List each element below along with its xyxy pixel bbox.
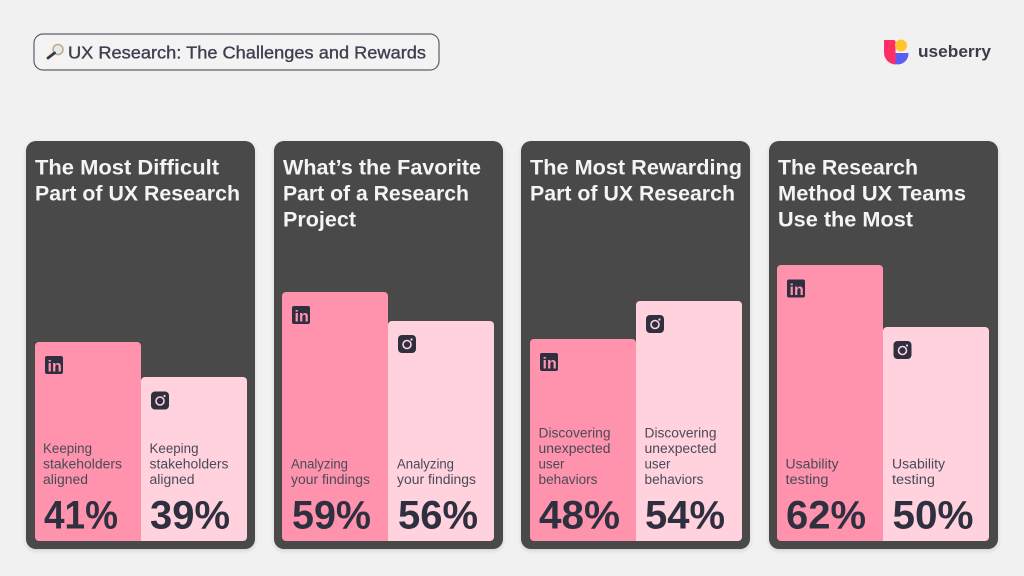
icon: LinkedIn: in	[790, 282, 804, 299]
panel heading: Method UX Teams	[778, 182, 966, 206]
bar: LinkedIn 62%	[777, 265, 883, 541]
label: aligned	[43, 472, 88, 487]
icon: LinkedIn	[787, 280, 805, 299]
bar: Instagram 54%	[636, 301, 742, 541]
panel: most used research method	[769, 141, 998, 549]
bar: Instagram 56%	[388, 321, 494, 541]
value: 41%	[44, 494, 118, 538]
icon: LinkedIn: in	[48, 358, 62, 376]
icon: Instagram	[398, 335, 416, 353]
label: stakeholders	[150, 456, 229, 472]
label: Keeping	[43, 441, 92, 456]
icon: magnifying glass	[48, 44, 63, 58]
bar: LinkedIn 59%	[282, 292, 388, 541]
label: Keeping	[150, 441, 198, 456]
icon: LinkedIn	[45, 356, 63, 376]
value: 62%	[786, 494, 866, 538]
label: Discovering	[538, 426, 610, 440]
label: testing	[892, 472, 935, 487]
icon: LinkedIn	[292, 306, 310, 326]
panel heading: The Most Difficult	[35, 156, 219, 180]
label: unexpected	[644, 441, 716, 456]
value: 50%	[892, 494, 974, 538]
logo: useberry	[884, 40, 992, 65]
label: behaviors	[538, 472, 598, 487]
icon: Instagram	[151, 392, 169, 410]
value: 54%	[645, 494, 725, 538]
label: your findings	[397, 472, 476, 487]
label: Analyzing	[291, 456, 348, 472]
icon: LinkedIn: in	[294, 308, 309, 326]
label: Usability	[892, 456, 945, 472]
bar: Instagram 50%	[883, 327, 989, 541]
value: 39%	[150, 494, 230, 538]
label: Analyzing	[397, 456, 454, 472]
panel: most rewarding part	[521, 141, 750, 549]
icon: LinkedIn: in	[542, 356, 557, 372]
label: behaviors	[644, 472, 704, 487]
value: 48%	[539, 494, 620, 538]
title pill	[34, 34, 439, 70]
label: Discovering	[644, 426, 716, 440]
value: 56%	[398, 494, 478, 538]
label: user	[538, 456, 565, 472]
title text: UX Research: The Challenges and Rewards	[68, 42, 426, 62]
wordmark: useberry	[918, 42, 992, 61]
panel heading: The Research	[778, 156, 918, 180]
label: your findings	[291, 472, 370, 487]
value: 59%	[292, 494, 371, 538]
bar: LinkedIn 41%	[35, 342, 141, 541]
panel heading: Part of UX Research	[530, 182, 735, 206]
label: user	[644, 456, 671, 472]
label: testing	[786, 472, 828, 487]
panel heading: Use the Most	[778, 208, 913, 232]
label: stakeholders	[43, 456, 122, 472]
panel heading: Part of UX Research	[35, 182, 240, 206]
label: Usability	[786, 456, 839, 472]
bar: Instagram 39%	[141, 377, 247, 541]
icon: Instagram	[894, 341, 912, 359]
bar: LinkedIn 48%	[530, 339, 636, 541]
panel heading: Project	[283, 208, 356, 232]
label: unexpected	[538, 441, 610, 456]
panel: favorite part	[274, 141, 503, 549]
panel heading: What’s the Favorite	[283, 156, 481, 180]
label: aligned	[150, 472, 194, 487]
panel heading: The Most Rewarding	[530, 156, 742, 180]
icon: useberry mark	[884, 40, 909, 65]
panel heading: Part of a Research	[283, 182, 469, 206]
icon: LinkedIn	[540, 353, 558, 372]
icon: Instagram	[646, 315, 664, 333]
panel: most difficult part	[26, 141, 255, 549]
